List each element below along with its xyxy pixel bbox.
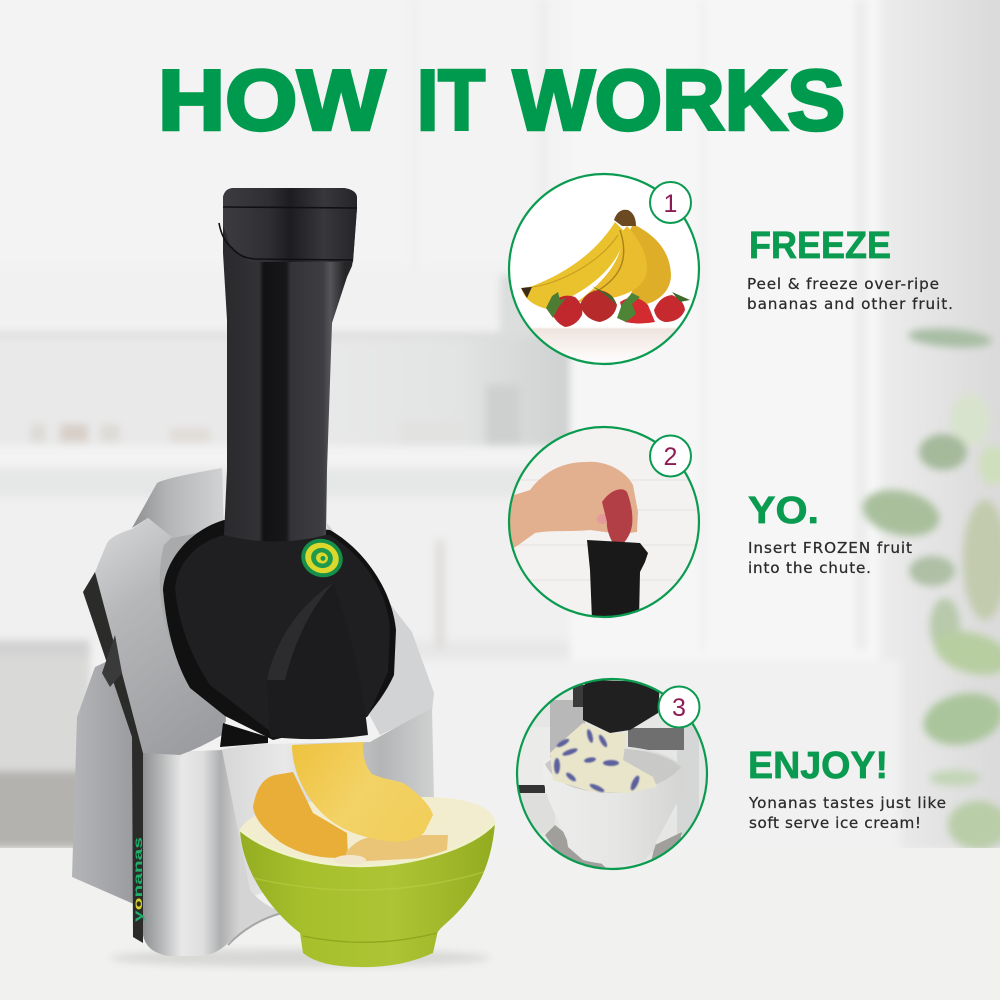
title (158, 54, 845, 148)
step 2 text: into the chute. (748, 559, 871, 577)
step 3 text (748, 745, 946, 832)
silver base behind dome right (327, 523, 434, 735)
front leg and foot (143, 750, 282, 956)
silver base behind dome left (145, 520, 226, 730)
step number 2: 2 (664, 443, 677, 471)
step 1 circle (509, 174, 700, 366)
cone spout (267, 583, 368, 739)
icon: strawberries (546, 286, 690, 327)
background plant (858, 326, 1000, 849)
step 1 text: bananas and other fruit. (747, 295, 953, 313)
step number 3: 3 (672, 694, 686, 722)
title: HOW (158, 54, 386, 148)
step 2 text (748, 490, 912, 577)
power switch (102, 635, 122, 687)
step 3 text: soft serve ice cream! (749, 814, 921, 832)
feed chute (223, 188, 357, 542)
icon: chute top (587, 540, 648, 620)
step 2 circle (508, 427, 700, 620)
frozen fruit lower left (253, 772, 348, 858)
step number 1: 1 (664, 190, 677, 218)
step number 3 (658, 686, 700, 728)
machine shadow (110, 949, 490, 967)
step 1 text: Peel & freeze over-ripe (747, 275, 939, 293)
step 3 text: Yonanas tastes just like (748, 794, 946, 812)
bowl interior (240, 797, 495, 866)
icon: machine spout (583, 680, 660, 733)
product: yonanas machine (72, 188, 495, 967)
circle ring (509, 174, 699, 364)
swirl logo (296, 533, 348, 583)
step 2 text: Insert FROZEN fruit (748, 539, 912, 557)
black dome (163, 520, 396, 740)
rear grey panel (72, 660, 136, 905)
frozen fruit stream (292, 742, 433, 842)
icon: frozen strawberry (602, 489, 632, 548)
icon: soft serve (550, 723, 657, 793)
step number 1 (650, 182, 691, 223)
icon: white bowl (542, 746, 684, 865)
step 3 circle (515, 679, 707, 872)
step 1 text (747, 225, 953, 313)
yonanas brand label: yonanas (131, 836, 145, 922)
step number 2 (650, 436, 691, 476)
icon: bananas (521, 210, 671, 309)
serrated base (220, 723, 268, 747)
soft fruit piece (334, 855, 366, 865)
green bowl (240, 823, 495, 967)
circle ring (509, 427, 699, 617)
step 2 text: YO. (748, 490, 819, 532)
dark side stripe (83, 572, 143, 943)
title: WORKS (513, 54, 845, 148)
right wall (220, 708, 434, 900)
front silver wing (95, 518, 225, 755)
icon: hand (508, 462, 638, 550)
step 1 text: FREEZE (749, 225, 891, 267)
circle ring (517, 679, 707, 869)
step 3 text: ENJOY! (748, 745, 888, 787)
rear top wing (132, 468, 224, 538)
frozen fruit right (346, 835, 448, 862)
title: IT (417, 54, 485, 148)
counter (0, 848, 1000, 1000)
